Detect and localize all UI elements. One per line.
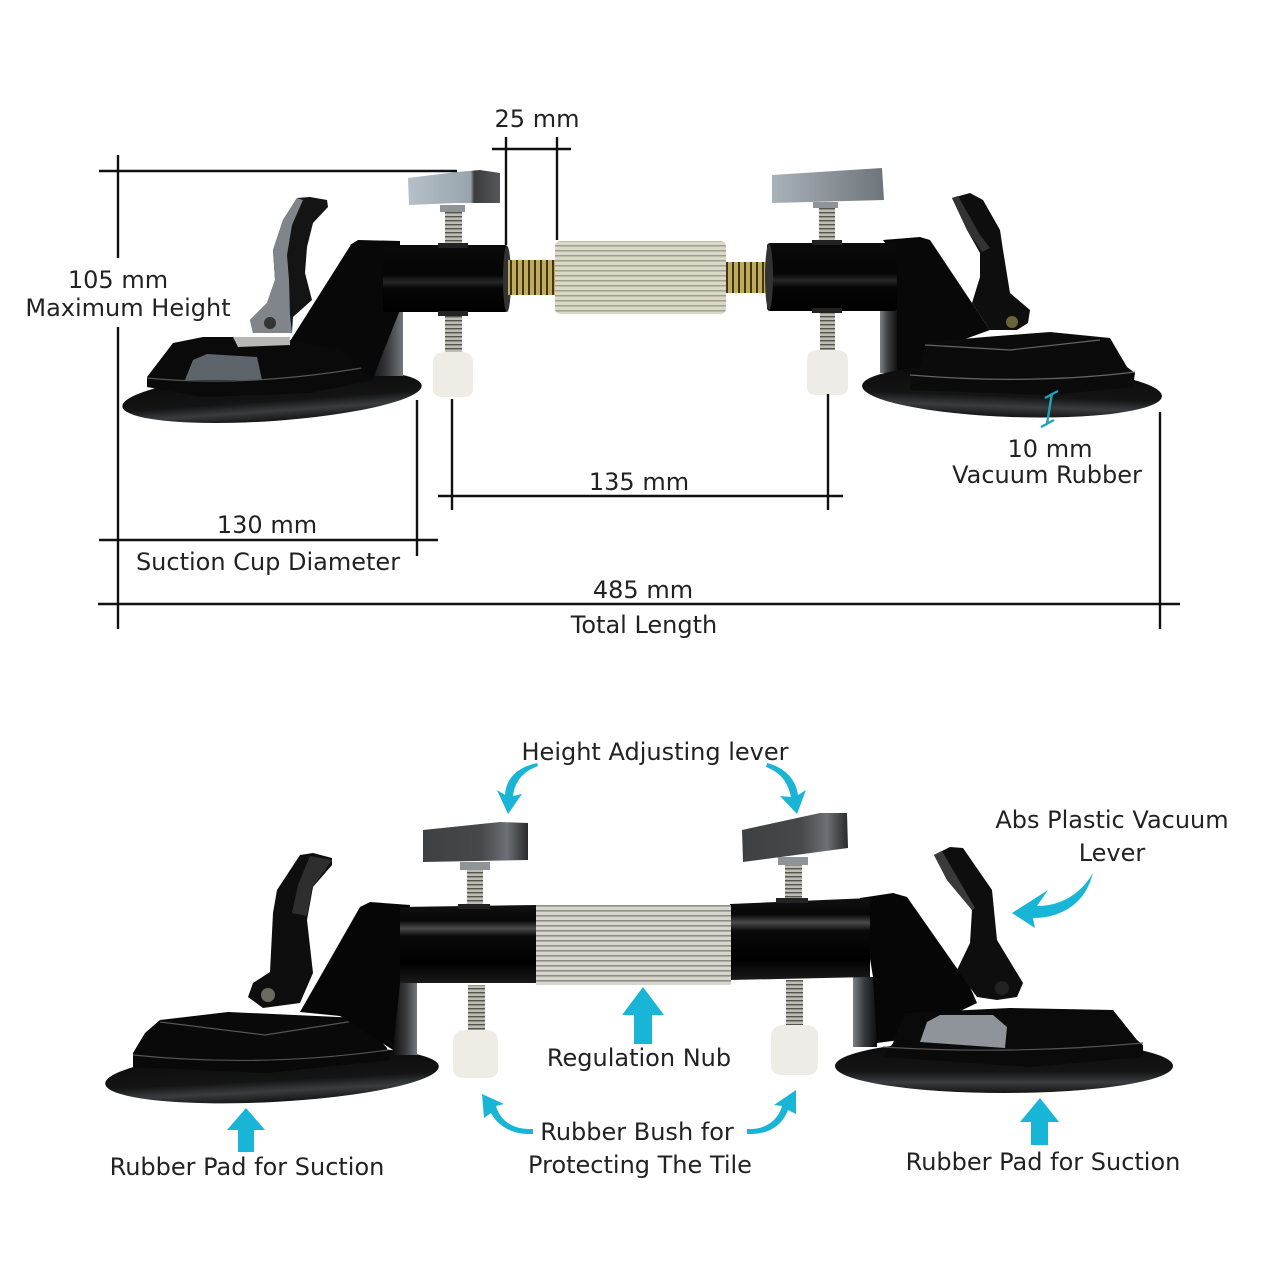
dimension: 10 mm vacuum rubber: Vacuum Rubber: [952, 461, 1142, 489]
left suction cup: [121, 300, 423, 431]
label: left rubber pad: Rubber Pad for Suction: [110, 1153, 384, 1181]
right vacuum lever: [934, 847, 1023, 1000]
right adjusting screw and knob: [772, 168, 884, 395]
dimension: 130 mm suction cup diameter: [99, 400, 438, 576]
dimension: 105 mm maximum height: 105 mm: [68, 266, 168, 294]
right vacuum lever: [952, 193, 1030, 330]
arrow: right lever: [766, 763, 806, 814]
right suction pad: [835, 1008, 1173, 1093]
threaded rod: [508, 260, 770, 295]
arrow: up to nub: [622, 987, 664, 1044]
dimension: 130 mm suction cup diameter: 130 mm: [217, 511, 317, 539]
arrow: vacuum lever: [1012, 873, 1093, 928]
product photo: bottom tool front view: [104, 813, 1173, 1111]
label: abs plastic vacuum lever: [995, 806, 1229, 928]
left adjusting screw and knob: [408, 170, 500, 397]
label: rubber bush: Rubber Bush for: [540, 1118, 734, 1146]
label: abs plastic vacuum lever: Lever: [1079, 839, 1145, 867]
label: right rubber pad: Rubber Pad for Suction: [906, 1148, 1180, 1176]
right suction cup: [861, 332, 1163, 422]
label: height adjusting lever: [497, 738, 806, 814]
dimension: 130 mm suction cup diameter: Suction Cup Diameter: [136, 548, 400, 576]
regulation nub photo: [536, 905, 731, 985]
label: abs plastic vacuum lever: Abs Plastic Vacuum: [995, 806, 1229, 834]
arrow: right bush: [747, 1090, 796, 1134]
right body and tube: [765, 237, 990, 378]
left height lever: [423, 822, 528, 1078]
label: regulation nub: Regulation Nub: [547, 1044, 731, 1072]
dimension: 105 mm maximum height: [25, 155, 457, 629]
regulation nub: [555, 241, 726, 314]
product photo: top tool side view: [121, 168, 1163, 431]
left vacuum lever: [233, 197, 328, 347]
dimension: 25 mm: [492, 105, 579, 245]
label: regulation nub: [547, 987, 731, 1072]
dimension: 105 mm maximum height: Maximum Height: [25, 294, 231, 322]
arrow: left lever: [497, 763, 538, 814]
arrow: up to left pad: [227, 1108, 265, 1152]
left suction pad: [104, 983, 440, 1111]
label: rubber bush: [482, 1090, 796, 1179]
main black tube and body: [300, 893, 977, 1050]
left body and tube: [290, 240, 511, 378]
dimension: 485 mm total length: [98, 412, 1180, 639]
dimension: 10 mm vacuum rubber: [952, 391, 1142, 489]
arrow: up to right pad: [1020, 1098, 1059, 1145]
label: left rubber pad: [110, 1108, 384, 1181]
dimension: 485 mm total length: 485 mm: [593, 576, 693, 604]
label: rubber bush: Protecting The Tile: [528, 1151, 752, 1179]
right height lever: [742, 813, 848, 1075]
dimension: 25 mm: 25 mm: [495, 105, 579, 133]
dimension: 485 mm total length: Total Length: [570, 611, 717, 639]
arrow: left bush: [482, 1094, 533, 1134]
dimension: 135 mm: 135 mm: [589, 468, 689, 496]
dimension: 10 mm vacuum rubber: 10 mm: [1008, 435, 1092, 463]
dimension: 135 mm: [438, 394, 843, 510]
label: right rubber pad: [906, 1098, 1180, 1176]
left vacuum lever: [248, 853, 332, 1008]
label: height adjusting lever: Height Adjusting lever: [522, 738, 789, 766]
